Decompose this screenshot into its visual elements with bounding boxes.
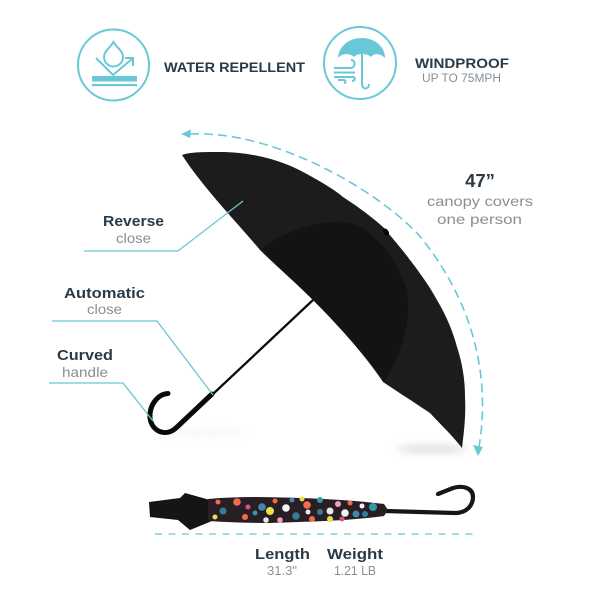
canopy tip (382, 227, 390, 237)
dimension line (155, 533, 475, 535)
text: canopy size: canopy covers (427, 193, 533, 209)
open umbrella photo (150, 152, 465, 448)
text: canopy size: one person (437, 211, 522, 227)
shaft (213, 300, 313, 394)
callout: reverse close (84, 201, 243, 251)
colored dots (212, 496, 377, 523)
callout: curved handle: handle (62, 365, 108, 380)
icon: windproof umbrella (324, 27, 396, 99)
text: weight: Weight (327, 546, 383, 563)
canopy inner panel (262, 222, 408, 381)
callout: automatic close (52, 286, 213, 395)
text: weight: 1.21 LB (334, 564, 376, 578)
callout: curved handle: Curved (57, 348, 113, 364)
text: length (255, 546, 310, 578)
callout: curved handle (49, 348, 153, 421)
canopy (182, 152, 465, 448)
text: canopy size (427, 170, 533, 227)
canopy tip (149, 493, 212, 530)
text: windproof: UP TO 75MPH (422, 73, 501, 85)
text: canopy size: 47” (465, 170, 495, 191)
callout: automatic close: close (87, 302, 122, 317)
callout: reverse close: close (116, 231, 151, 246)
icon: water repellent (78, 30, 149, 100)
closed umbrella photo (149, 487, 473, 530)
text: weight (327, 546, 383, 578)
heading: water repellent: WATER REPELLENT (164, 60, 306, 75)
text: windproof (415, 55, 509, 85)
text: length: Length (255, 546, 310, 563)
arrow: canopy span arc (181, 130, 483, 456)
text: length: 31.3" (267, 564, 297, 578)
text: windproof: WINDPROOF (415, 55, 509, 71)
callout: automatic close: Automatic (64, 286, 145, 302)
body (208, 497, 388, 523)
handle and hook (385, 487, 473, 513)
callout: reverse close: Reverse (103, 214, 164, 230)
handle (150, 394, 212, 433)
shadow: ground (160, 432, 468, 453)
